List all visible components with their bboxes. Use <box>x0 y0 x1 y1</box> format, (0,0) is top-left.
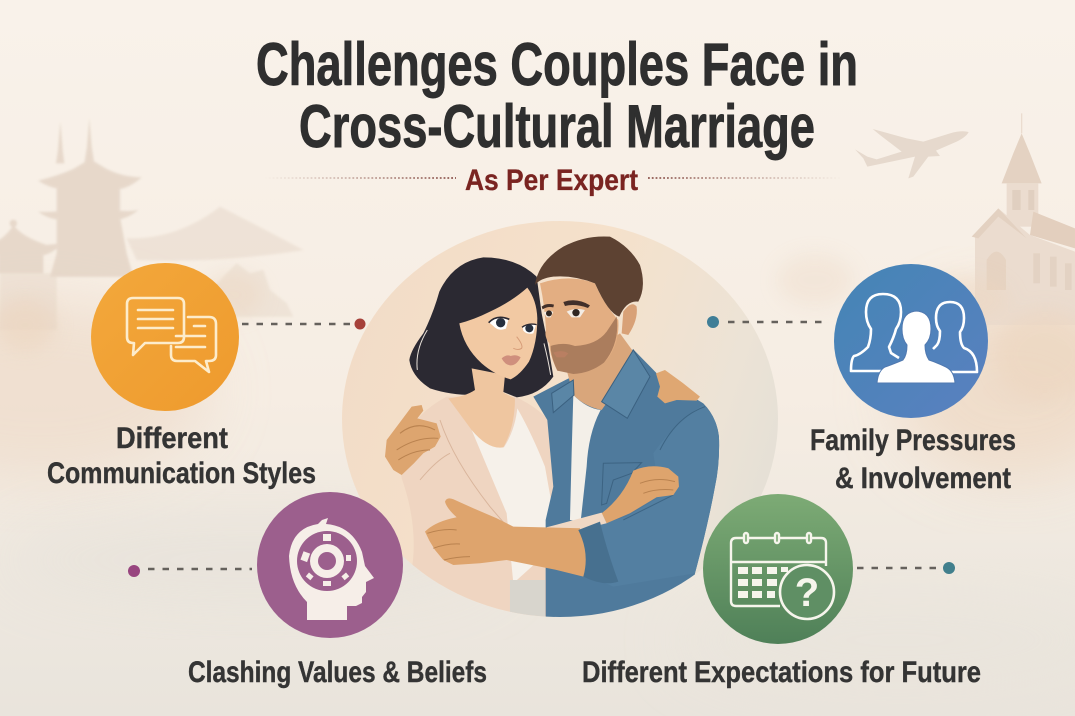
background: pagoda and temple silhouettes <box>0 118 303 330</box>
subtitle with dotted rules: As Per Expert <box>465 164 638 197</box>
man's shirt <box>533 349 719 620</box>
man's forearm and hand on her arm <box>425 498 591 577</box>
label: family pressures and involvement <box>810 424 1016 495</box>
woman's cardigan <box>401 397 558 618</box>
woman's sleeve cuff <box>546 512 607 530</box>
man's ear <box>622 304 637 335</box>
shirt pocket <box>602 463 642 505</box>
cardigan folds <box>420 420 504 522</box>
woman's arm sleeve on right <box>695 417 720 573</box>
item: different expectations for future <box>582 494 981 689</box>
icon: calendar with question mark: ? <box>795 571 819 615</box>
finger lines: left hand <box>397 426 438 460</box>
man's beard <box>551 317 617 374</box>
man's hand on her shoulder <box>385 405 441 475</box>
background: airplane silhouette <box>855 129 969 178</box>
woman's top lower shaded panel <box>510 580 545 620</box>
label: family pressures and involvement: Family Pressures <box>810 424 1016 457</box>
woman's neck and chest <box>448 368 515 448</box>
woman's face <box>459 288 537 379</box>
icon: calendar with question mark <box>703 494 853 644</box>
item: different communication styles <box>47 263 366 490</box>
title: Challenges Couples Face in <box>256 31 858 98</box>
woman's features <box>489 317 537 365</box>
man's collar <box>552 350 650 418</box>
man's face <box>540 278 618 373</box>
man's hand on his own shoulder <box>656 370 700 403</box>
connector: expectations <box>857 562 955 574</box>
man's hair <box>535 236 643 317</box>
label: family pressures and involvement: & Involvement <box>835 462 1011 495</box>
icon: head with gear <box>257 492 403 638</box>
hair highlights <box>417 330 551 375</box>
label: clashing values and beliefs: Clashing Values & Beliefs <box>188 656 487 689</box>
title <box>256 31 858 160</box>
woman's hand on man's arm <box>602 466 679 523</box>
item: clashing values and beliefs <box>128 492 487 689</box>
man's t-shirt <box>570 395 601 522</box>
icon: speech bubbles <box>91 263 239 411</box>
woman's hair <box>409 257 553 397</box>
icon: family group <box>834 264 988 418</box>
man's features <box>542 300 590 317</box>
connector: values <box>128 565 252 577</box>
item: family pressures and involvement <box>707 264 1016 495</box>
background: foliage washes <box>0 254 1075 400</box>
woman's white top <box>472 408 553 583</box>
title: Cross-Cultural Marriage <box>299 93 815 160</box>
man's rolled cuff <box>578 522 618 583</box>
label: different communication styles: Different <box>116 422 228 455</box>
background: church silhouette <box>972 113 1075 325</box>
man's lips <box>553 351 568 357</box>
finger lines: lower hand <box>427 530 470 560</box>
sleeve seam <box>623 407 705 520</box>
central illustration: couple embracing <box>342 221 778 620</box>
finger lines: right hand <box>640 479 675 493</box>
connector: communication <box>242 318 366 330</box>
label: different communication styles <box>47 422 316 490</box>
label: different communication styles: Communication Styles <box>47 457 316 490</box>
connector: family <box>707 316 826 328</box>
label: different expectations for future: Different Expectations for Future <box>582 656 981 689</box>
man's neck <box>567 333 635 410</box>
